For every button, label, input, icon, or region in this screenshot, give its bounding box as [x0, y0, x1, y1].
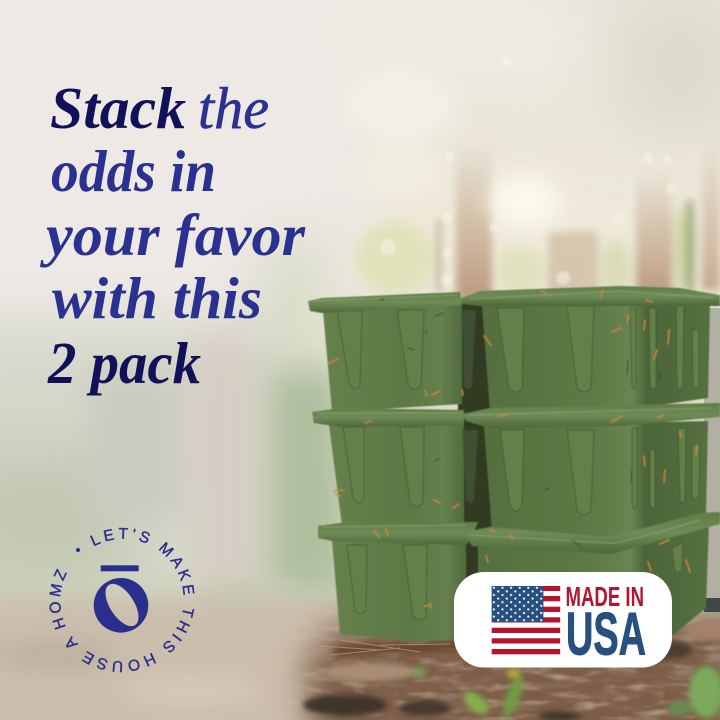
product: stack of green crates	[308, 286, 720, 642]
soil texture: dark patches	[315, 647, 720, 720]
lid: bottom left	[318, 522, 478, 545]
lid: top left	[308, 292, 462, 313]
crate: middle right	[484, 421, 708, 540]
text: USA: USA	[566, 600, 646, 668]
crate: bottom left	[332, 540, 466, 642]
crate: bottom right	[478, 522, 709, 640]
lid: bottom right	[465, 512, 720, 554]
crate: top right	[482, 303, 710, 412]
lid: middle left	[312, 408, 464, 427]
dot separator	[76, 548, 80, 552]
text: made in: MADE IN	[566, 581, 644, 612]
title line 3: your favor	[40, 202, 306, 268]
title line 4: with this	[52, 265, 262, 331]
plants in foreground	[411, 666, 720, 719]
title line 1b: the	[198, 75, 269, 141]
title	[40, 75, 306, 396]
title line 1: Stack	[50, 75, 186, 141]
title line 5: 2 pack	[47, 330, 201, 396]
circular slogan: LET'S MAKE THIS HOUSE A HOMZ	[49, 528, 194, 672]
made in USA badge	[454, 572, 672, 668]
logo mark: o with macron	[94, 565, 148, 633]
bokeh spots	[380, 57, 676, 286]
soil left side (hazy)	[0, 580, 340, 720]
straw on soil	[320, 640, 450, 655]
tarp behind crates	[704, 308, 720, 612]
crate: top left	[323, 305, 476, 412]
soil right side	[250, 600, 720, 720]
soil texture: light streaks	[303, 618, 720, 720]
lid: top right	[461, 286, 720, 306]
dark gap between stacks	[458, 302, 492, 642]
crate: middle left	[329, 424, 478, 526]
lid: middle right	[463, 403, 720, 428]
logo badge	[49, 528, 194, 672]
title line 2: odds in	[51, 138, 216, 204]
icon: american flag	[492, 586, 560, 654]
